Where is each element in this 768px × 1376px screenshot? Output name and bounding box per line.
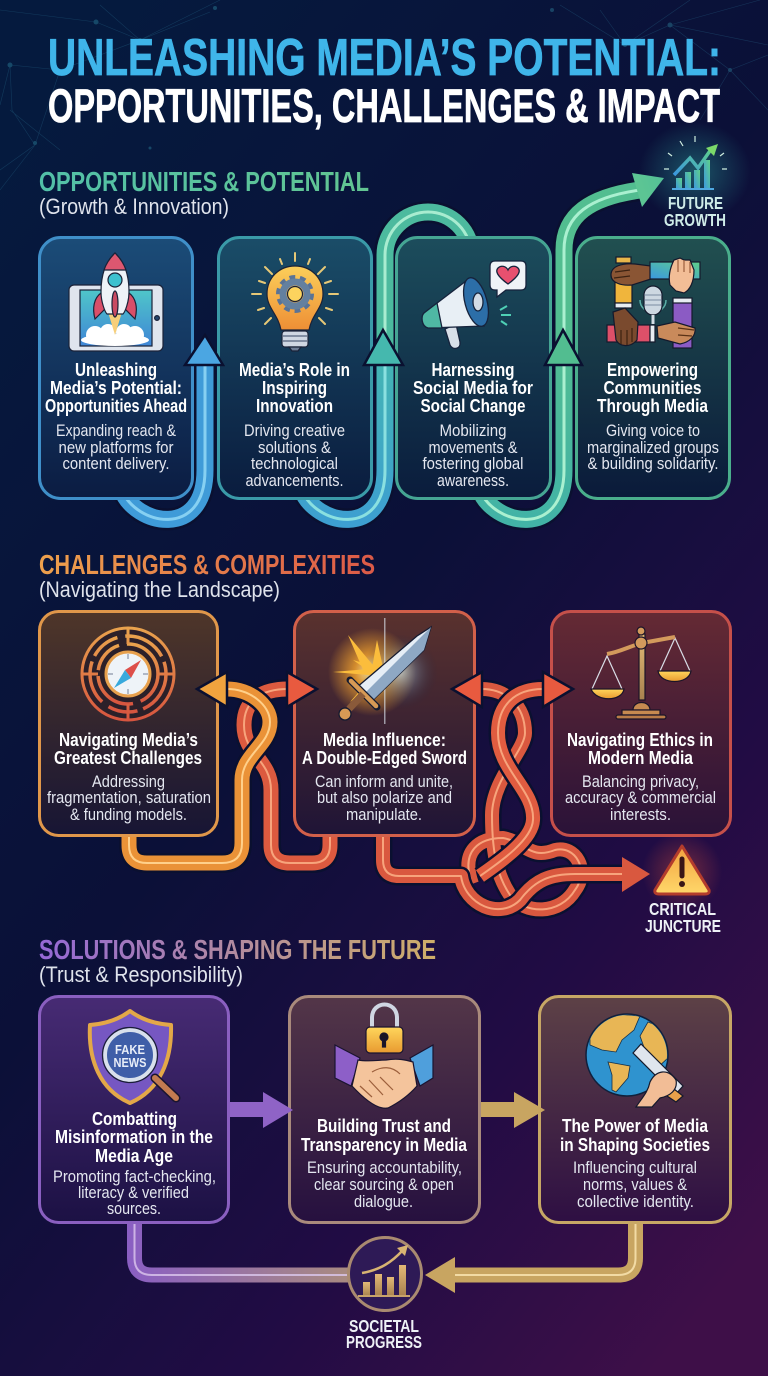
icon: compass in maze xyxy=(82,628,174,720)
icon: shield with magnifier: FAKE xyxy=(115,1042,145,1057)
label: societal progress xyxy=(346,1316,422,1352)
heading: challenges: (Navigating the Landscape) xyxy=(39,577,280,602)
title xyxy=(597,360,709,416)
label: societal progress: SOCIETAL xyxy=(349,1316,419,1336)
heading: solutions: SOLUTIONS & SHAPING THE FUTURE xyxy=(39,934,436,965)
label: future growth xyxy=(664,193,726,230)
description: content delivery. xyxy=(62,455,170,473)
description: sources. xyxy=(107,1200,161,1218)
ribbon: orange strand xyxy=(129,689,270,863)
icon: scales of justice xyxy=(591,627,691,719)
title: Innovation xyxy=(256,396,333,416)
description xyxy=(587,422,719,473)
description: Mobilizing xyxy=(440,422,506,440)
panel: harnessing social media xyxy=(396,238,550,498)
title xyxy=(560,1116,710,1155)
icon: double-edged sword xyxy=(328,618,438,724)
label: critical juncture xyxy=(645,899,721,936)
panel: media's role in inspiring innovation xyxy=(218,238,372,498)
description xyxy=(244,422,345,490)
description: norms, values & xyxy=(583,1176,687,1194)
description: interests. xyxy=(610,806,671,824)
heading: solutions: (Trust & Responsibility) xyxy=(39,962,243,987)
icon: handshake under open padlock xyxy=(335,1004,433,1108)
arrow: purple to trust xyxy=(230,1092,293,1128)
description: fragmentation, saturation xyxy=(47,789,211,807)
description xyxy=(307,1159,462,1211)
description xyxy=(53,1168,216,1218)
ribbon: path to critical juncture xyxy=(383,837,624,909)
title xyxy=(55,1109,213,1166)
icon: hands around microphone xyxy=(607,257,700,348)
title: Inspiring xyxy=(262,378,327,398)
panel: navigating media's greatest challenges xyxy=(40,612,218,836)
title xyxy=(45,360,187,416)
panel: combatting misinformation xyxy=(40,996,228,1222)
arrow head: green xyxy=(545,330,582,365)
icon: societal progress xyxy=(348,1238,422,1310)
description: Can inform and unite, xyxy=(315,773,453,791)
title: Media Influence: xyxy=(323,730,446,750)
description: clear sourcing & open xyxy=(314,1176,454,1194)
title: Media Age xyxy=(95,1146,173,1166)
arrow head: teal xyxy=(364,330,403,365)
description: marginalized groups xyxy=(587,439,719,457)
title: in Shaping Societies xyxy=(560,1135,710,1155)
ribbon: red left strand xyxy=(244,689,330,863)
description: new platforms for xyxy=(58,439,174,457)
description: fostering global xyxy=(422,455,524,473)
description: movements & xyxy=(428,439,518,457)
heading: solutions xyxy=(39,934,436,987)
title: Combatting xyxy=(92,1109,177,1129)
heading: challenges xyxy=(39,549,375,602)
description: accuracy & commercial xyxy=(565,789,716,807)
title: Social Media for xyxy=(413,378,533,398)
title: Greatest Challenges xyxy=(54,748,202,768)
description: but also polarize and xyxy=(317,789,452,807)
title xyxy=(567,730,713,768)
description xyxy=(573,1159,697,1211)
description: collective identity. xyxy=(577,1193,694,1211)
description: dialogue. xyxy=(354,1193,413,1211)
arrow head: blue xyxy=(185,335,223,365)
title xyxy=(54,730,202,768)
description: & building solidarity. xyxy=(588,455,718,473)
panel: navigating ethics xyxy=(552,612,730,836)
description xyxy=(47,773,211,824)
description: Balancing privacy, xyxy=(582,773,699,791)
ribbons: tangled challenge paths xyxy=(129,672,650,909)
title: Misinformation in the xyxy=(55,1127,213,1147)
arrow head: orange xyxy=(197,672,227,707)
title: Navigating Ethics in xyxy=(567,730,713,750)
description: & funding models. xyxy=(70,806,187,824)
heading: opportunities: OPPORTUNITIES & POTENTIAL xyxy=(39,166,369,197)
description: awareness. xyxy=(437,472,509,490)
ribbon: knot strand two xyxy=(480,689,543,876)
panel: building trust xyxy=(290,996,480,1222)
description: advancements. xyxy=(246,472,344,490)
title: Media’s Role in xyxy=(239,360,350,380)
bottom connector: gold xyxy=(425,1224,636,1293)
title: Harnessing xyxy=(432,360,514,380)
arrow head: red right xyxy=(287,672,317,707)
arrow head: red left xyxy=(452,672,482,707)
description: Expanding reach & xyxy=(56,422,176,440)
title xyxy=(48,29,721,132)
title: Through Media xyxy=(597,396,709,416)
title: A Double-Edged Sword xyxy=(302,748,467,768)
description: technological xyxy=(251,455,338,473)
icon: megaphone with heart bubble xyxy=(422,261,526,348)
label: societal progress: PROGRESS xyxy=(346,1332,422,1352)
label: future growth: FUTURE xyxy=(668,193,723,213)
description xyxy=(56,422,176,473)
title: Opportunities Ahead xyxy=(45,396,187,416)
description: Ensuring accountability, xyxy=(307,1159,462,1177)
heading: opportunities xyxy=(39,166,369,219)
arrow: gold to power xyxy=(481,1092,545,1128)
title: Navigating Media’s xyxy=(59,730,198,750)
title: Communities xyxy=(604,378,702,398)
title: Building Trust and xyxy=(317,1116,451,1136)
description: solutions & xyxy=(258,439,331,457)
bottom connector: purple xyxy=(134,1224,350,1275)
title: Transparency in Media xyxy=(301,1135,468,1155)
panel: the power of media xyxy=(540,996,730,1222)
description xyxy=(422,422,524,490)
panel: empowering communities xyxy=(576,238,730,498)
label: critical juncture: JUNCTURE xyxy=(645,916,721,936)
icon: rocket launching from tablet xyxy=(69,253,163,351)
description: Influencing cultural xyxy=(573,1159,697,1177)
description: Promoting fact-checking, xyxy=(53,1168,216,1186)
description: literacy & verified xyxy=(78,1184,189,1202)
description xyxy=(565,773,716,824)
title: The Power of Media xyxy=(562,1116,709,1136)
title: Social Change xyxy=(420,396,526,416)
icon: future growth xyxy=(639,122,751,222)
arrow head: to critical juncture xyxy=(622,857,650,892)
ribbons behind opportunity cards xyxy=(122,190,640,519)
description: Driving creative xyxy=(244,422,345,440)
icon: warning triangle xyxy=(642,832,722,912)
description xyxy=(315,773,453,824)
title: Empowering xyxy=(607,360,698,380)
label: future growth: GROWTH xyxy=(664,210,726,230)
icon: light bulb with gear xyxy=(252,253,338,351)
icon: globe held by hand with pen xyxy=(586,1014,683,1107)
title xyxy=(302,730,467,768)
title: Media’s Potential: xyxy=(50,378,182,398)
title xyxy=(413,360,533,416)
title: Modern Media xyxy=(588,748,694,768)
decorative network pattern xyxy=(0,0,768,190)
description: manipulate. xyxy=(346,806,422,824)
description: Giving voice to xyxy=(606,422,700,440)
title: Unleashing xyxy=(75,360,157,380)
description: Addressing xyxy=(92,773,165,791)
arrow head: red right two xyxy=(543,672,573,707)
heading: opportunities: (Growth & Innovation) xyxy=(39,194,229,219)
icon: shield with magnifier: NEWS xyxy=(114,1055,147,1070)
title xyxy=(239,360,350,416)
heading: challenges: CHALLENGES & COMPLEXITIES xyxy=(39,549,375,580)
icon: shield with magnifier xyxy=(90,1011,176,1103)
ribbon: knot strand one xyxy=(468,689,581,909)
panel: media influence xyxy=(294,612,474,836)
panel: unleashing media's potential xyxy=(40,238,192,498)
label: critical juncture: CRITICAL xyxy=(649,899,716,919)
title xyxy=(301,1116,468,1155)
arrow: to future growth xyxy=(632,173,664,207)
